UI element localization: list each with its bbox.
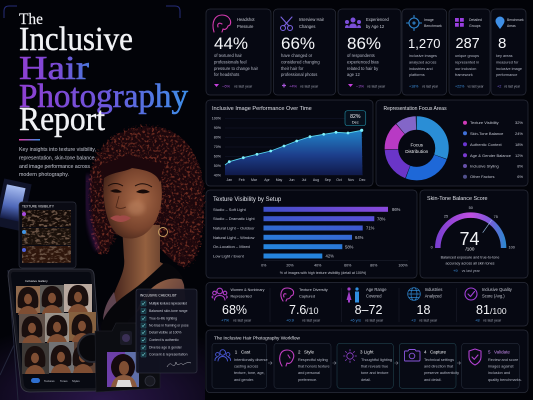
gallery tabs [31,378,80,383]
KPI card: headshot pressure: Pressure [237,24,254,29]
panel: skin-tone balance gauge: /100 [466,246,475,252]
stat: industries: Analyzed [425,294,442,298]
step 4: capture: Capture [430,350,447,354]
gallery tabs: Textures [44,379,55,383]
stat: quality score: 81 [476,303,490,317]
x axis labels: Oct [336,178,342,182]
stat: quality score [465,287,513,322]
chart heading: Texture Visibility by Setup [213,197,282,203]
donut legend: 18% [515,142,523,147]
KPI card: detailed groups [449,9,490,95]
stat: quality score: Inclusive Quality [482,287,513,292]
left arm [103,292,120,320]
step 3: light [337,343,393,388]
step 4: capture: Technical settings [424,358,454,362]
neck and chest [112,225,173,320]
step 2: style: and personal [298,371,320,375]
stat: age range: 8–72 [355,303,382,317]
gauge value: 74 [459,229,480,249]
KPI card: headshot pressure: 44% [214,34,248,53]
callout: December value: 82% [350,114,361,120]
gauge scale labels: 50 [469,206,473,210]
gauge caption: Balanced exposure and true-to-tone [441,255,499,259]
texture swatches [22,210,71,263]
stat: women and nonbinary: 68% [222,303,247,317]
stat: industries: 18 [417,303,430,317]
hero photo collage [0,126,205,400]
stat: women and nonbinary [212,288,265,322]
KPI card: benchmark areas: measured for [496,60,519,64]
donut legend: Skin-Tone Balance [470,131,504,136]
arrow [268,362,272,364]
gallery tabs: Styles [72,379,80,383]
KPI card: benchmark areas: vs last year [504,84,521,88]
bar labels [213,207,255,258]
gauge scale labels: 100 [509,246,515,250]
arrow [457,362,460,364]
camera [78,323,160,392]
x axis [261,260,408,275]
donut legend: Other Factors [470,174,494,179]
title block: Photography [19,78,188,115]
callout: December value: Dec [352,120,359,124]
shoulder [150,268,186,322]
KPI card: detailed groups: Groups [469,24,481,28]
KPI card: headshot pressure: for headshots [214,72,239,77]
x axis: 80% [370,264,378,268]
checklist items: True-to-life lighting [149,316,177,320]
y axis labels and grid: 70% [214,145,222,149]
x axis: 100% [398,264,408,268]
KPI card: headshot pressure: of textured hair [214,53,243,58]
panel: skin-tone balance gauge [420,190,528,278]
x axis labels: Jan [226,178,232,182]
gauge scale labels: 25 [444,214,448,218]
KPI card: interview hair changes: considered changing [281,60,320,64]
bar values: 78% [377,216,386,221]
KPI card: image benchmark: Benchmark [424,24,442,28]
KPI card: detailed groups: our inclusion [455,67,476,71]
gauge scale labels [431,206,515,250]
step 1: cast: casting across [234,364,258,368]
KPI card: interview hair changes: have changed or [281,53,313,58]
stat: texture diversity: +0.9 [286,318,295,322]
donut legend: 24% [515,131,523,136]
donut centre label: Distribution [405,149,429,154]
stat: age range: Covered [366,294,382,298]
stat: texture diversity: 7.6 [289,303,306,317]
stat: age range [346,287,387,322]
donut legend: 12% [515,153,523,158]
gauge heading: Skin-Tone Balance Score [427,196,488,202]
black top [101,263,184,365]
x axis labels: Jun [289,178,295,182]
step 5: validate: 5 [488,350,491,354]
stat: industries [408,287,442,322]
step 2: style: Style [304,350,315,354]
KPI card: interview hair changes [274,9,336,95]
KPI card: image benchmark: analyzed across [409,60,437,64]
arrow [332,362,336,364]
step 1: cast: texture, tone, age, [234,371,265,375]
KPI card: benchmark areas: Benchmark [507,18,524,22]
stat: age range: +6 yrs [350,318,361,322]
KPI card: benchmark areas: inclusive image [496,67,522,71]
stat: women and nonbinary: Women & Nonbinary [230,288,265,292]
signature [167,362,191,367]
KPI card: experienced by age 12: experienced bias [347,60,379,64]
bar labels: Studio – Soft Light [213,207,247,212]
x axis: 20% [286,264,294,268]
bar values: 58% [345,244,354,249]
KPI card: interview hair changes: Changes [299,24,315,29]
checklist items: Consent & representation [149,353,188,357]
step 2: style: preference. [298,378,317,382]
donut centre label: Focus [410,142,424,148]
stat: quality score: Score (Avg.) [482,294,505,298]
KPI card: image benchmark: Image [424,18,434,22]
KPI card: experienced by age 12 [338,9,401,95]
donut legend: 8% [517,164,523,168]
KPI card: interview hair changes: Interview Hair [299,17,325,22]
step 1: cast: and gender. [234,378,254,382]
step 3: light: detail. [361,378,371,382]
x axis labels: Mar [251,178,258,182]
KPI card: interview hair changes: their hair for [281,66,304,71]
x axis labels: May [276,178,283,182]
icon: grid [455,18,464,27]
title text: The [19,11,43,28]
stat: quality score: vs last year [483,318,502,322]
KPI card: headshot pressure: Headshot [237,17,255,22]
title block [4,6,188,178]
accent rule [19,139,40,140]
step 4: capture: and direction that [424,364,454,368]
bar labels: On-Location – Mixed [213,244,250,249]
intro text [19,147,96,178]
KPI card: experienced by age 12: of respondents [347,53,375,58]
KPI card: detailed groups: Detailed [469,18,482,22]
panel: workflow [206,330,528,392]
x axis labels: Apr [264,178,271,182]
KPI card: experienced by age 12: vs last year [367,84,386,88]
donut centre label [405,142,429,154]
step 3: light: that reveals true [361,364,388,368]
stat: age range: vs last year [365,318,384,322]
gauge delta: vs last year [462,269,481,273]
icon: head [213,15,231,32]
panel: representation focus areas [376,100,528,186]
studio floor glow [0,300,205,400]
x axis: 0% [261,264,267,268]
KPI card: image benchmark: industries and [409,67,433,71]
step 4: capture [399,343,459,388]
icon: pin [496,16,504,29]
gauge caption [441,255,499,266]
step 3: light: Thoughtful lighting [361,358,392,362]
step 1: cast: 1 [235,350,238,354]
checklist items: Diverse age & gender [149,345,183,349]
KPI card: benchmark areas: performance [496,73,517,77]
step 5: validate [462,343,522,388]
bar labels: Low Light / Event [213,254,245,258]
chart title: Inclusive Image Performance Over Time [212,106,312,112]
stat: industries: Industries [425,287,442,292]
bar values: 42% [326,254,334,259]
bar values: 71% [366,226,375,231]
bar labels: Natural Light – Window [213,235,254,240]
KPI card: image benchmark: platforms [409,73,425,77]
donut chart [391,123,442,174]
KPI card: headshot pressure [206,9,271,95]
stat: women and nonbinary: Represented [230,294,252,298]
KPI card: experienced by age 12: −3% [356,84,365,88]
donut legend: Authentic Context [470,142,502,147]
title block: Hair [19,50,90,87]
x axis labels [226,178,366,182]
KPI card: image benchmark: inclusive images [409,54,437,58]
portrait: woman with curly hair [87,126,204,365]
y axis labels and grid [212,116,363,178]
KPI card: image benchmark: 1,270 [408,36,441,51]
camera live view screen [107,352,139,387]
checklist items: Balanced skin-tone range [149,309,188,313]
KPI card: image benchmark: vs last year [422,84,439,88]
gauge scale labels: 75 [494,215,498,219]
KPI card: interview hair changes: vs last year [300,84,319,88]
KPI card: detailed groups: vs last year [468,84,485,88]
stat: women and nonbinary: +7% [221,318,230,322]
KPI card: experienced by age 12: age 12 [347,72,360,77]
bars [264,207,388,258]
checklist title: INCLUSIVE CHECKLIST [140,294,177,298]
checklist items [141,301,189,357]
KPI card: interview hair changes: +4% [289,84,298,88]
step 5: validate: inclusion and [488,371,510,375]
gauge delta: +9 [453,268,458,273]
x axis labels: Feb [239,178,245,182]
bar values [326,207,401,259]
step 5: validate: Review and score [488,358,518,362]
stat: texture diversity: vs last year [302,318,321,322]
stat: industries: +3 [411,318,416,322]
checklist items: Multiple textures represented [149,302,187,306]
panel: performance line chart [206,100,373,186]
panel: summary stats strip [206,282,528,326]
donut legend: 6% [517,174,523,179]
x axis labels: Dec [359,178,366,182]
KPI card: detailed groups: framework [455,73,473,77]
KPI card: benchmark areas: Areas [507,24,516,28]
step 3: light: tone and texture [361,371,388,375]
donut legend: 32% [515,120,523,125]
step 3: light: 3 Light [360,350,374,354]
y axis labels and grid: 40% [214,174,222,178]
checklist items: No bias in framing or pose [149,324,189,328]
inclusive checklist [136,289,197,373]
x axis: % of images with high texture visibility (detail at 100%) [280,271,366,275]
step 1: cast [212,343,268,388]
step 5: validate: images against [488,364,514,368]
step 2: style: 2 [298,350,301,354]
softbox light [0,179,32,400]
KPI card: interview hair changes: professional photos [281,72,317,77]
bar labels: Natural Light – Outdoor [213,226,255,230]
step 2: style [274,343,331,388]
x axis labels: Jul [302,178,306,182]
gallery header: Inclusive Gallery [25,279,48,283]
KPI card: benchmark areas: 8 [498,35,506,52]
panel heading: Representation Focus Areas [384,106,447,112]
stat: quality score: /100 [490,306,507,316]
KPI card: experienced by age 12: 86% [347,34,381,53]
gauge caption: accuracy across all skin tones [446,262,495,266]
tablet gallery [8,269,102,392]
area and line [225,129,363,175]
KPI card: headshot pressure: professionals feel [214,60,247,64]
gallery grid of portraits [16,284,96,374]
panel: texture visibility bar chart [206,190,417,278]
bar values: 64% [355,235,364,240]
donut legend: Age & Gender Balance [470,153,512,158]
y axis labels and grid: 60% [214,154,222,158]
KPI card: detailed groups: unique groups [455,54,479,58]
step 2: style: Respectful styling [298,358,328,362]
gauge arc [438,215,504,248]
gauge delta [453,268,481,273]
donut legend [463,120,523,179]
step 1: cast: Intentionally diverse [234,358,268,362]
KPI card: benchmark areas [491,9,526,95]
checklist items: Detail visible at 100% [149,331,181,335]
y axis labels and grid: 80% [214,136,222,140]
KPI card: detailed groups: +22% [455,84,465,88]
stat: texture diversity: Texture Diversity [299,287,328,292]
donut legend: Inclusive Styling [470,164,499,168]
stat: age range: Age Range [366,287,387,292]
workflow heading: The Inclusive Hair Photography Workflow [214,336,301,340]
KPI card: headshot pressure: pressure to change hair [214,66,259,71]
step 1: cast: Cast [241,350,251,354]
gallery tabs: Tones [60,379,68,383]
KPI card: detailed groups: represented in [455,60,479,64]
y axis labels and grid: 90% [214,126,222,130]
KPI card: experienced by age 12: related to hair by [347,66,379,71]
stat: texture diversity: Captured [299,294,315,298]
x axis labels: Aug [313,178,319,182]
KPI card: experienced by age 12: Experienced [366,17,389,22]
icon: people [345,18,361,28]
y axis labels and grid: 50% [214,164,222,168]
step 4: capture: and detail. [424,378,442,382]
KPI card: headshot pressure: −6% [222,84,231,88]
bar labels: Studio – Dramatic Light [213,216,255,221]
KPI card: image benchmark: +18% [409,84,419,88]
texture visibility panel [19,202,76,268]
icon: target [406,16,422,30]
panel title: TEXTURE VISIBILITY [22,204,55,208]
KPI card: detailed groups: 287 [456,36,480,52]
callout: December value [345,111,366,126]
x axis labels: Nov [348,178,354,182]
gauge scale labels: 0 [431,246,433,250]
stat: quality score: +8 [475,318,480,322]
KPI card: image benchmark [402,9,446,95]
step 5: validate: quality benchmarks. [488,378,522,382]
step 2: style: that honors texture [298,364,330,368]
y axis labels and grid: 100% [212,116,222,120]
KPI card: benchmark areas: +2 [497,84,501,88]
x axis labels: Sep [325,178,331,182]
bar values: 86% [392,207,401,212]
checklist items: Context is authentic [149,338,179,342]
intro text: modern photography. [19,172,69,178]
gauge needle [483,220,492,233]
stat: texture diversity [281,287,328,322]
KPI card: experienced by age 12: by Age 12 [366,24,385,29]
step 4: capture: preserve authenticity [424,371,459,375]
x axis: 40% [314,264,322,268]
stat: texture diversity: /10 [306,306,319,316]
step 5: validate: Validate [494,350,510,354]
intro text: representation, skin-tone balance, [19,156,96,162]
title block: Inclusive [19,21,133,58]
step 4: capture: 4 [424,350,427,354]
icon: scissors [280,17,292,30]
arrow [394,362,398,364]
stat: women and nonbinary: vs last year [233,318,252,322]
title block: Report [19,101,106,138]
KPI card: benchmark areas: key areas [496,54,513,58]
intro text: and image performance across [19,164,90,170]
stat: industries: vs last year [419,318,438,322]
intro text: Key insights into texture visibility, [19,147,96,153]
earring [158,228,168,236]
KPI card: interview hair changes: 66% [281,34,315,53]
face [103,167,162,239]
donut legend: Texture Visibility [470,120,499,125]
x axis: 60% [344,264,352,268]
KPI card: headshot pressure: vs last year [234,84,253,88]
